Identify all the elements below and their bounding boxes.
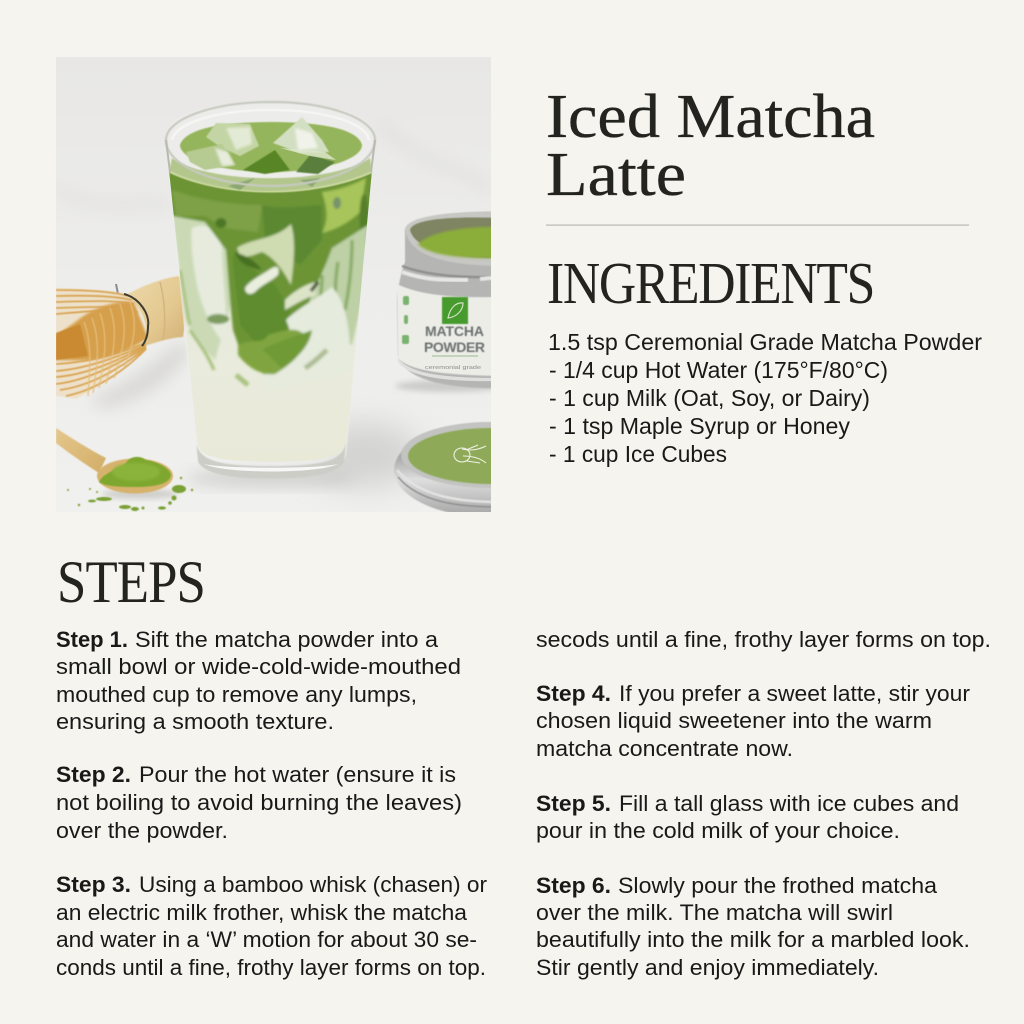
- step 5: Fill a tall glass with ice cubes and: [619, 791, 959, 816]
- jar label text: [424, 326, 485, 353]
- step 6: [536, 873, 970, 980]
- step 6: Slowly pour the frothed matcha: [618, 873, 938, 898]
- drink swirl: [169, 172, 372, 462]
- step 2: Step 2.: [56, 762, 131, 787]
- title: Iced Matcha: [546, 83, 875, 151]
- step 3: [56, 872, 487, 980]
- icon: bamboo whisk: [56, 276, 190, 408]
- step 3: an electric milk frother, whisk the matcha: [56, 900, 468, 925]
- step 4: matcha concentrate now.: [536, 736, 793, 761]
- step 5: pour in the cold milk of your choice.: [536, 818, 900, 843]
- step 3 continued: secods until a fine, frothy layer forms on top.: [536, 627, 991, 652]
- main green: [165, 165, 378, 375]
- step 1: Step 1.: [56, 627, 128, 652]
- lower right white: [263, 286, 351, 377]
- step 1: ensuring a smooth texture.: [56, 709, 334, 734]
- step 3: and water in a ‘W’ motion for about 30 se-: [56, 927, 477, 952]
- photo: iced matcha latte scene: [56, 57, 491, 512]
- step 4: [536, 681, 970, 761]
- step 2: [56, 762, 462, 843]
- step 4: If you prefer a sweet latte, stir your: [619, 681, 970, 706]
- small spots: [207, 314, 229, 324]
- icon: jar logo leaf: [448, 303, 463, 318]
- illustration: glass of matcha latte: [160, 101, 380, 479]
- step 1: small bowl or wide-cold-wide-mouthed: [56, 654, 461, 679]
- step 6: beautifully into the milk for a marbled look.: [536, 927, 970, 952]
- title: Latte: [546, 141, 686, 209]
- heading: ingredients: INGREDIENTS: [547, 250, 874, 316]
- ingredients list: [548, 329, 982, 467]
- step 1: [56, 627, 461, 734]
- heading: steps: STEPS: [57, 549, 205, 615]
- jar label text: MATCHA: [425, 323, 484, 339]
- step 2: not boiling to avoid burning the leaves): [56, 790, 462, 815]
- glass shadow: [310, 423, 420, 487]
- step 5: [536, 791, 959, 843]
- icon: lid leaf logo: [454, 445, 486, 463]
- s-curl: [237, 224, 294, 285]
- lower green lobe: [238, 330, 306, 374]
- title: [546, 83, 875, 209]
- ingredients list: - 1/4 cup Hot Water (175°F/80°C): [549, 357, 888, 383]
- step 3: Step 3.: [56, 872, 131, 897]
- icon: matcha powder jar: ceremonial grade: [425, 365, 481, 371]
- rim: [166, 102, 375, 186]
- ingredients list: - 1 tsp Maple Syrup or Honey: [549, 413, 850, 439]
- jar label text: POWDER: [424, 339, 485, 355]
- step 1: Sift the matcha powder into a: [135, 627, 439, 652]
- glass base: [196, 446, 346, 479]
- icon: wooden spoon with matcha: [56, 428, 193, 511]
- icon: tin lid: [394, 422, 491, 512]
- step 6: over the milk. The matcha will swirl: [536, 900, 893, 925]
- step 2: over the powder.: [56, 818, 228, 843]
- step 6: Step 6.: [536, 873, 611, 898]
- step 3: Using a bamboo whisk (chasen) or: [139, 872, 487, 897]
- step 4: Step 4.: [536, 681, 611, 706]
- step 1: mouthed cup to remove any lumps,: [56, 682, 417, 707]
- ingredients list: - 1 cup Ice Cubes: [549, 441, 727, 467]
- ice cubes: [186, 117, 336, 190]
- step 4: chosen liquid sweetener into the warm: [536, 708, 932, 733]
- right mottled: [310, 224, 367, 346]
- icon: matcha powder jar: [396, 211, 491, 394]
- step 3: conds until a fine, frothy layer forms on top.: [56, 955, 486, 980]
- pale right lobe: [322, 178, 366, 233]
- step 6: Stir gently and enjoy immediately.: [536, 955, 879, 980]
- ingredients list: 1.5 tsp Ceremonial Grade Matcha Powder: [548, 329, 982, 355]
- step 2: Pour the hot water (ensure it is: [139, 762, 456, 787]
- drink surface: [180, 122, 362, 172]
- ingredients list: - 1 cup Milk (Oat, Soy, or Dairy): [549, 385, 870, 411]
- step 5: Step 5.: [536, 791, 611, 816]
